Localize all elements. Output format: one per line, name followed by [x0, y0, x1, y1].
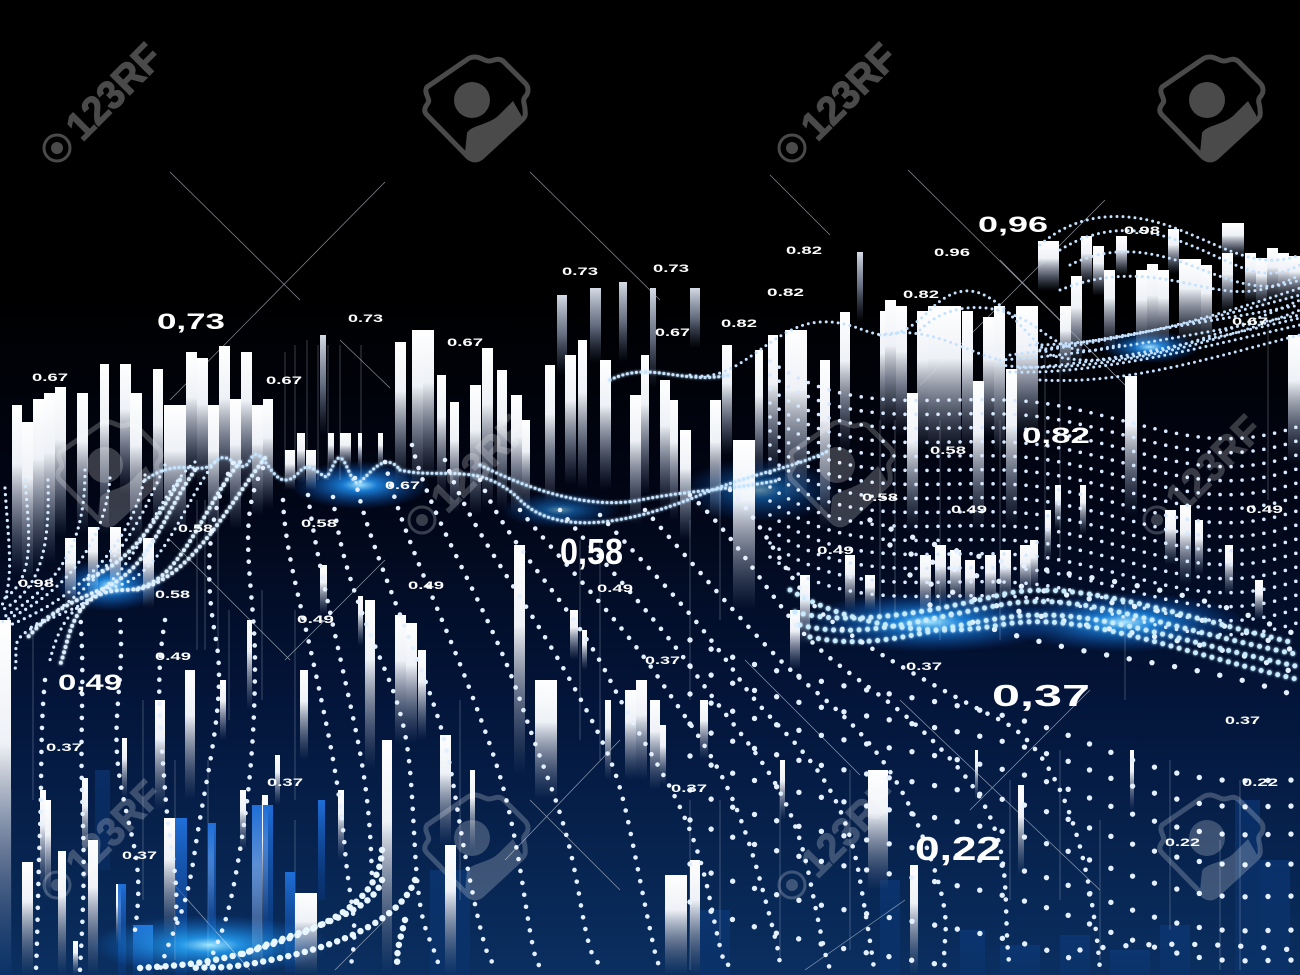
watermark: lower rows	[33, 408, 1271, 910]
small value labels: 0.58	[155, 589, 190, 601]
watermark logo right	[768, 36, 906, 173]
dotted wave: left fan strands	[2, 462, 215, 670]
small value labels: 0.37	[906, 661, 942, 673]
small value labels: 0.96	[934, 247, 970, 259]
thin vertical lines	[33, 320, 1268, 970]
thin crossing diagonal lines	[170, 170, 1125, 970]
small value labels: 0.49	[597, 583, 633, 595]
dotted wave: bright left strands	[25, 458, 265, 665]
dotted wave: right mesh rows	[770, 361, 1300, 635]
small value labels: 0.37	[46, 742, 82, 754]
small value labels: 0.82	[721, 318, 757, 330]
small value labels: 0.37	[1225, 715, 1260, 727]
small value labels: 0.49	[951, 504, 987, 516]
large value labels: 0,82	[1022, 423, 1090, 448]
bar cluster: left skyline	[12, 346, 383, 582]
watermark logo bottom left: 123RF	[58, 773, 171, 886]
watermark logo bottom right: 123RF	[793, 773, 906, 886]
small value labels: 0.22	[1242, 777, 1278, 789]
small value labels: 0.73	[562, 266, 598, 278]
large value labels: 0,37	[992, 678, 1090, 713]
watermark stamp bottom right	[1160, 795, 1263, 898]
bar cluster: upper middle short bars	[320, 252, 863, 435]
dotted wave: lower right rows	[690, 520, 1300, 966]
blue lower bars	[118, 800, 325, 975]
dotted wave: bright right band	[790, 590, 1300, 680]
bar cluster: lower bars	[0, 620, 1134, 975]
small value labels: 0.67	[385, 480, 420, 492]
small value labels: 0.73	[653, 263, 689, 275]
small value labels: 0.67	[32, 372, 68, 384]
bar cluster: far right skyline	[1038, 223, 1300, 465]
large value labels: 0,96	[978, 212, 1048, 237]
small value labels: 0.98	[1124, 225, 1160, 237]
watermark logo bottom right	[768, 773, 906, 910]
small value labels	[18, 225, 1283, 862]
small value labels: 0.82	[786, 245, 822, 257]
watermark logo mid: 123RF	[423, 408, 536, 521]
small value labels: 0.49	[817, 545, 854, 557]
watermark logo bottom left	[33, 773, 171, 910]
data labels	[18, 212, 1283, 867]
small value labels: 0.73	[348, 313, 383, 325]
watermark stamp mid-left	[58, 422, 161, 525]
dotted wave: downward strands	[36, 445, 1100, 970]
small value labels: 0.58	[862, 492, 898, 504]
small value labels: 0.58	[178, 523, 213, 535]
watermark stamp bottom middle	[425, 795, 528, 898]
small value labels: 0.58	[301, 518, 337, 530]
small value labels: 0.82	[903, 289, 939, 301]
small value labels: 0.37	[671, 783, 707, 795]
small value labels: 0.49	[155, 651, 191, 663]
watermark logo right: 123RF	[793, 36, 906, 149]
large value labels	[58, 212, 1090, 867]
blue glows	[55, 331, 1245, 975]
watermark: top row	[33, 36, 1263, 173]
watermark logo far right	[1133, 408, 1271, 545]
small value labels: 0.67	[1232, 316, 1268, 328]
dotted wave: top band over left and middle	[145, 372, 830, 523]
watermark logo left	[33, 36, 171, 173]
dotted wave: upper right ribbons	[690, 216, 1300, 381]
small value labels: 0.37	[122, 850, 157, 862]
small value labels: 0.67	[655, 327, 690, 339]
small value labels: 0.37	[267, 777, 303, 789]
small value labels: 0.67	[266, 375, 302, 387]
large value labels: 0,22	[915, 830, 1001, 867]
watermark stamp left	[425, 57, 528, 160]
small value labels: 0.67	[447, 337, 483, 349]
small value labels: 0.82	[767, 287, 804, 299]
watermark logo mid	[398, 408, 536, 545]
small value labels: 0.49	[297, 614, 334, 626]
bar cluster: second skyline	[395, 330, 530, 515]
dotted wave: bright lower-left sweep	[140, 850, 415, 968]
bar cluster: central skyline	[545, 300, 1137, 610]
small value labels: 0.37	[645, 655, 680, 667]
small value labels: 0.49	[1246, 504, 1283, 516]
large value labels: 0,58	[560, 531, 623, 572]
large value labels: 0,49	[58, 670, 122, 695]
small value labels: 0.49	[408, 580, 444, 592]
watermark stamp right	[1160, 57, 1263, 160]
small value labels: 0.22	[1165, 837, 1200, 849]
watermark stamp mid-right	[790, 422, 893, 525]
small value labels: 0.58	[930, 445, 966, 457]
watermark logo left: 123RF	[58, 36, 171, 149]
watermark logo far right: 123RF	[1158, 408, 1271, 521]
large value labels: 0,73	[157, 309, 225, 334]
dim blue background bars	[0, 770, 1290, 975]
bar cluster: middle row	[65, 485, 1263, 800]
small value labels: 0.98	[18, 578, 54, 590]
